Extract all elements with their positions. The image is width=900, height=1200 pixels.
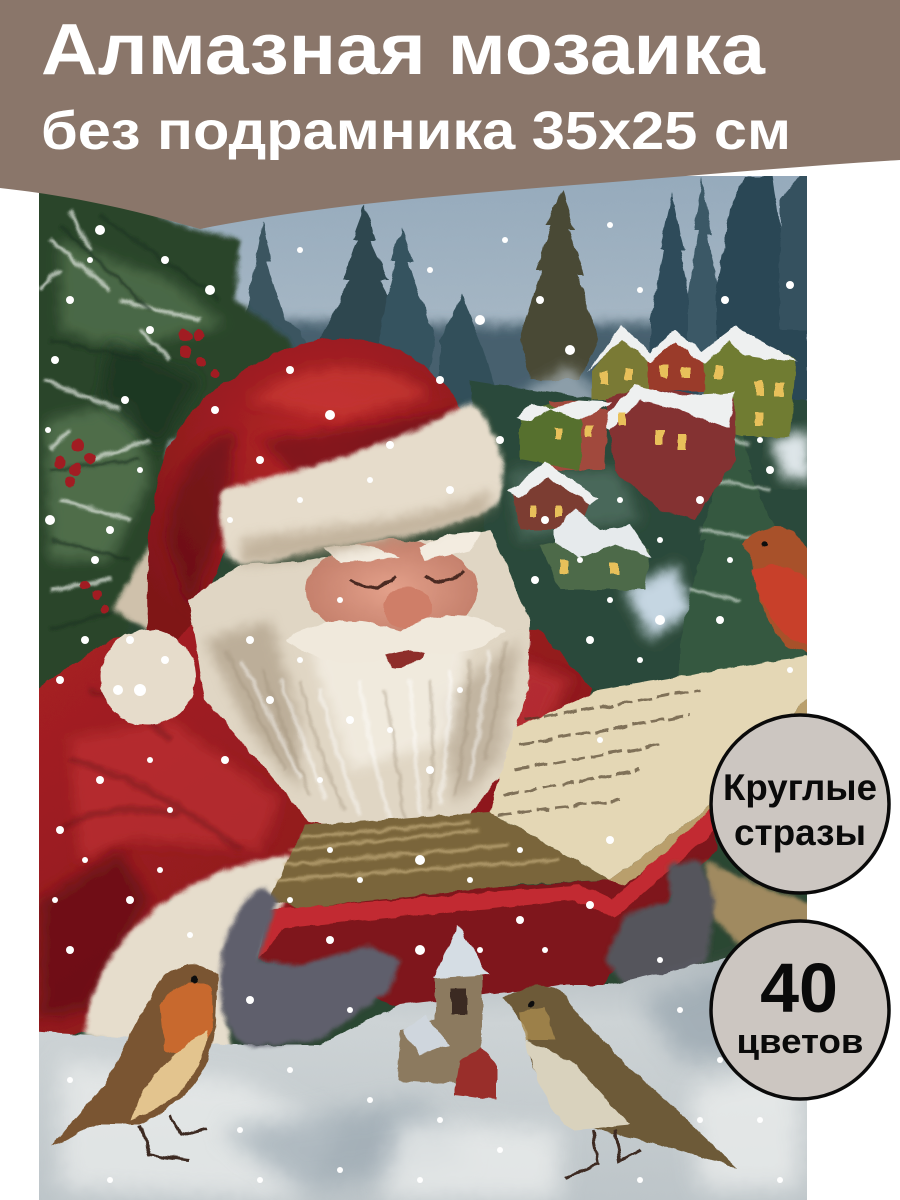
bird at lower right xyxy=(503,986,737,1178)
left glove xyxy=(220,888,400,1047)
beard of Santa xyxy=(188,530,530,832)
fluffy hair behind hat xyxy=(110,544,214,630)
fur cuff on sleeve xyxy=(85,855,290,1050)
painting: Santa reading a book in a snowy village xyxy=(20,160,820,1200)
large fir tree at left xyxy=(39,193,294,632)
robin at lower left xyxy=(50,965,218,1160)
small church model xyxy=(398,925,497,1100)
banner with title xyxy=(0,0,900,229)
fir tree and foliage at right xyxy=(470,380,810,690)
badge: 40 colors: 40 xyxy=(760,949,838,1027)
pompom of hat xyxy=(100,629,196,725)
distant forest xyxy=(246,176,807,410)
brim shading xyxy=(240,490,490,565)
title line 2: без подрамника 35х25 см xyxy=(41,101,791,161)
face of Santa xyxy=(285,531,505,669)
hat of Santa xyxy=(147,338,470,650)
falling snow xyxy=(45,222,794,1183)
robe of Santa xyxy=(20,625,592,1040)
badge: 40 colors: цветов xyxy=(736,1023,864,1061)
snowy village houses xyxy=(508,325,798,590)
fur brim of hat xyxy=(220,402,503,564)
badge: round rhinestones: Круглые xyxy=(723,767,877,808)
underpainting xyxy=(70,460,807,1046)
bird behind glove xyxy=(705,860,815,950)
title line 1: Алмазная мозаика xyxy=(41,10,766,90)
robin at right edge xyxy=(742,526,807,652)
right glove xyxy=(605,860,715,988)
badge: round rhinestones: стразы xyxy=(734,812,866,853)
badge: 40 colors xyxy=(711,921,889,1099)
red berries xyxy=(54,329,220,612)
badge: round rhinestones xyxy=(711,715,889,893)
snowy ground xyxy=(39,956,807,1200)
sky background xyxy=(154,176,807,460)
open book xyxy=(258,655,810,1008)
